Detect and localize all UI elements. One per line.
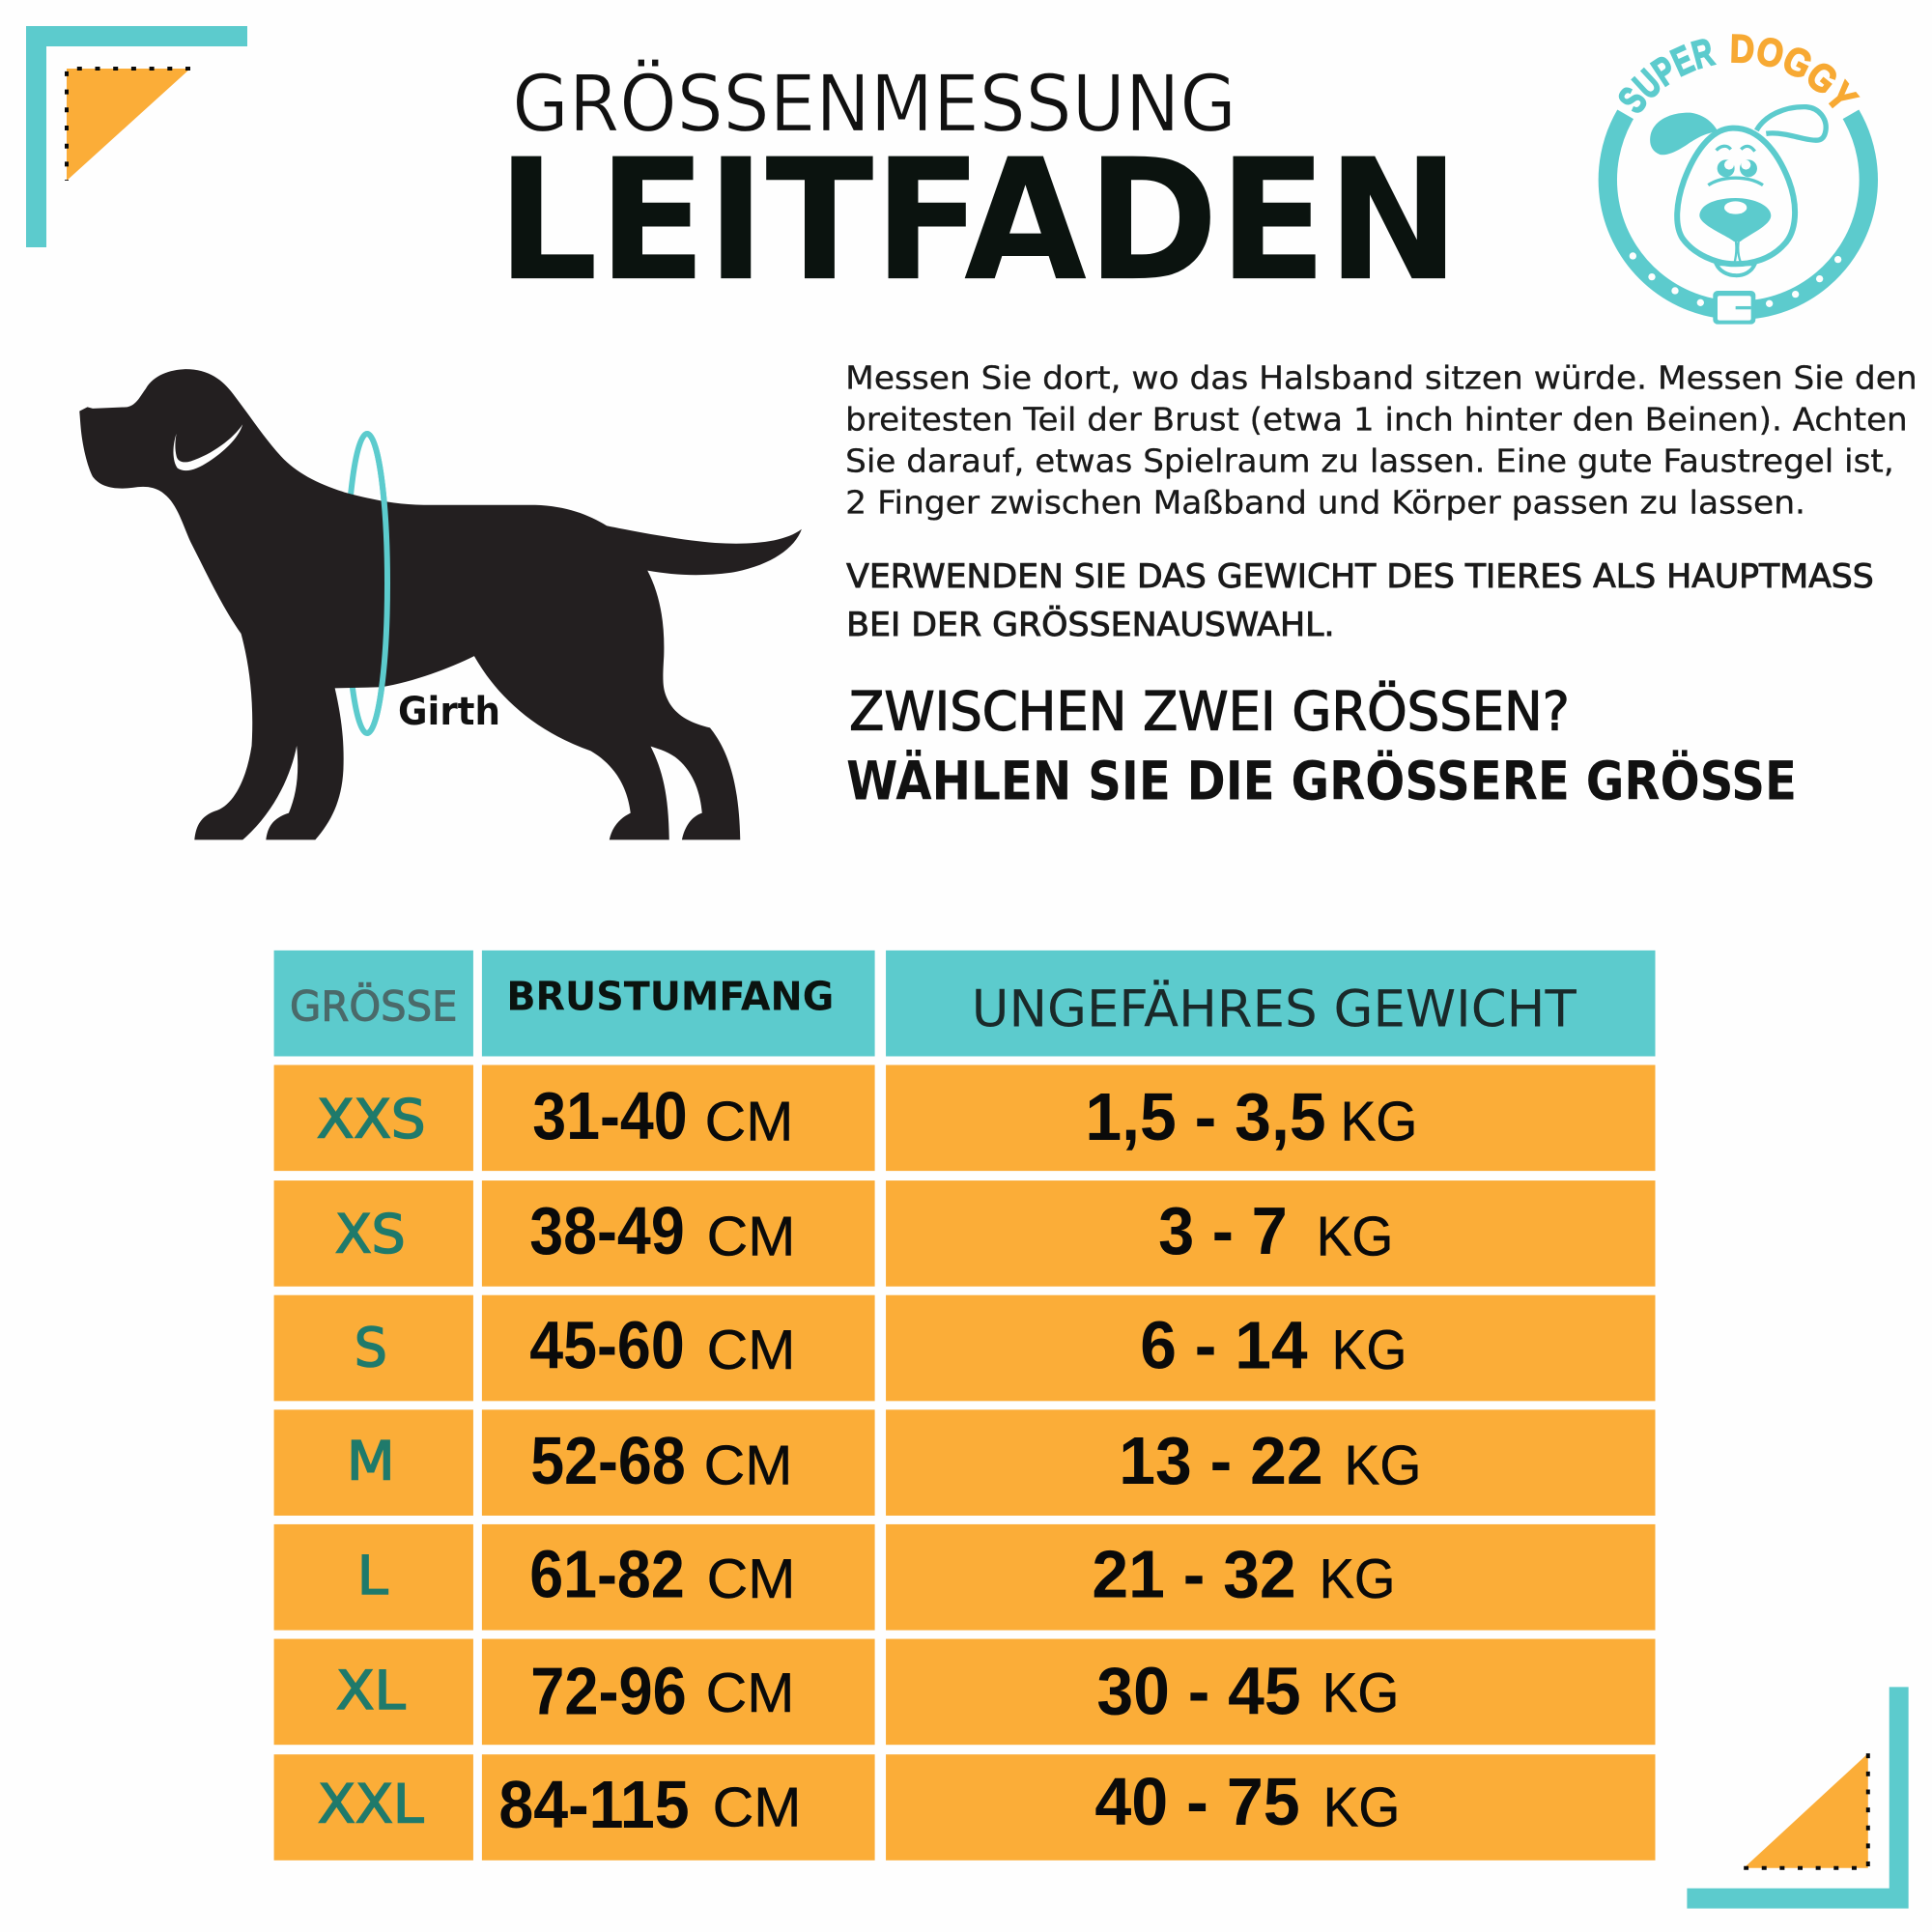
row L: CM <box>707 1548 795 1610</box>
row XS: XS <box>335 1203 406 1264</box>
weight note: BEI DER GRÖSSENAUSWAHL. <box>846 605 1335 643</box>
row S: CM <box>707 1320 795 1381</box>
row S <box>274 1295 1655 1401</box>
dog illustration with girth measure <box>79 369 802 839</box>
row XXS: CM <box>705 1092 793 1153</box>
row XS: 3 - 7 <box>1158 1193 1288 1268</box>
row S: S <box>355 1317 387 1378</box>
instructions paragraph <box>845 359 1918 521</box>
logo dog face <box>1650 107 1826 275</box>
row XL: XL <box>336 1660 406 1721</box>
row XXL: XXL <box>318 1773 424 1834</box>
row S: KG <box>1332 1320 1406 1381</box>
row XXS: XXS <box>317 1089 426 1151</box>
instructions paragraph: Messen Sie dort, wo das Halsband sitzen würde. Messen Sie den <box>845 359 1918 397</box>
row XS <box>274 1180 1655 1287</box>
row M: KG <box>1345 1435 1421 1497</box>
instructions paragraph: breitesten Teil der Brust (etwa 1 inch hinter den Beinen). Achten <box>845 401 1908 439</box>
row XXS: 1,5 - 3,5 <box>1085 1079 1326 1154</box>
row XXL: CM <box>713 1776 801 1838</box>
row L <box>274 1524 1655 1631</box>
row S: 6 - 14 <box>1140 1307 1308 1382</box>
table header <box>274 951 1655 1056</box>
title: GRÖSSENMESSUNG <box>512 60 1236 151</box>
table header: BRUSTUMFANG <box>506 974 834 1020</box>
row M: CM <box>704 1435 792 1497</box>
girth ring back <box>347 434 387 733</box>
row M: 52-68 <box>530 1423 686 1498</box>
row S: 45-60 <box>529 1307 685 1382</box>
row L: 21 - 32 <box>1092 1537 1296 1612</box>
row XXS: 31-40 <box>532 1078 688 1153</box>
row XL: 30 - 45 <box>1096 1653 1301 1728</box>
row L: 61-82 <box>529 1537 685 1612</box>
instructions paragraph: 2 Finger zwischen Maßband und Körper passen zu lassen. <box>845 483 1805 521</box>
between sizes callout: WÄHLEN SIE DIE GRÖSSERE GRÖSSE <box>846 750 1797 811</box>
row XXL: 84-115 <box>498 1767 690 1842</box>
row XXL <box>274 1754 1655 1861</box>
title: LEITFADEN <box>497 123 1460 318</box>
row M: 13 - 22 <box>1119 1423 1323 1498</box>
logo wordmark: SUPER <box>1619 39 1718 113</box>
girth label: Girth <box>398 690 500 734</box>
weight note <box>846 557 1874 643</box>
row XXL: 40 - 75 <box>1094 1764 1300 1839</box>
logo collar ring <box>1607 114 1868 325</box>
table header: GRÖSSE <box>290 982 457 1032</box>
row L: KG <box>1320 1548 1395 1610</box>
between sizes callout <box>846 681 1797 811</box>
row L: L <box>357 1545 388 1606</box>
row XXL: KG <box>1323 1776 1400 1838</box>
corner decoration: top left <box>26 26 247 247</box>
corner decoration: bottom right <box>1687 1687 1909 1909</box>
row XL: 72-96 <box>530 1653 687 1728</box>
row M: M <box>347 1431 395 1492</box>
instructions paragraph: Sie darauf, etwas Spielraum zu lassen. Eine gute Faustregel ist, <box>845 441 1894 479</box>
row XL: KG <box>1322 1662 1399 1724</box>
weight note: VERWENDEN SIE DAS GEWICHT DES TIERES ALS HAUPTMASS <box>846 557 1874 595</box>
row XL: CM <box>706 1662 794 1724</box>
logo: Super Doggy <box>1598 34 1878 325</box>
row XS: KG <box>1317 1206 1393 1267</box>
girth ring front <box>367 434 387 733</box>
logo wordmark: DOGGY <box>1731 34 1861 108</box>
row XL <box>274 1639 1655 1745</box>
row XXS: KG <box>1341 1092 1417 1153</box>
row XS: 38-49 <box>529 1193 685 1268</box>
row XS: CM <box>707 1206 795 1267</box>
table header: UNGEFÄHRES GEWICHT <box>972 980 1577 1039</box>
between sizes callout: ZWISCHEN ZWEI GRÖSSEN? <box>849 681 1570 743</box>
size table <box>274 951 1655 1861</box>
row XXS <box>274 1065 1655 1171</box>
dog silhouette <box>79 369 802 839</box>
row M <box>274 1409 1655 1516</box>
logo wordmark <box>1619 34 1861 113</box>
